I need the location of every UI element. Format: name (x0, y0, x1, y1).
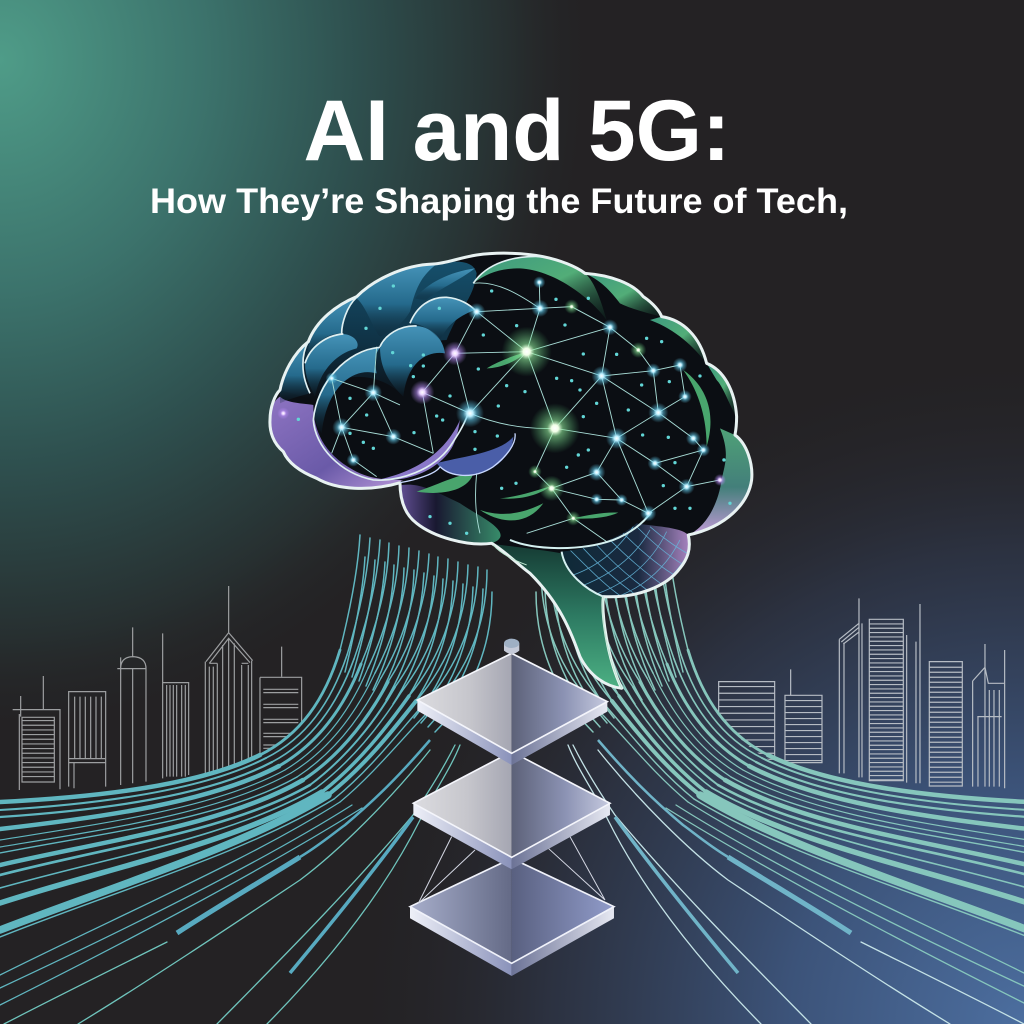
right city skyline (719, 598, 1005, 788)
upper lobe underlay (280, 262, 477, 400)
brain stem (492, 543, 622, 688)
right thin lower strands (568, 745, 1024, 1024)
title: AI and 5G: (304, 83, 730, 179)
right lower lobe (688, 428, 752, 535)
left thick lower strands (177, 740, 430, 973)
left city skyline (13, 586, 302, 790)
middle plate (413, 752, 610, 869)
blue lobes (280, 264, 475, 433)
neuron dots (298, 286, 730, 533)
right thick lower strands (598, 740, 851, 973)
glowing green hubs (502, 299, 646, 526)
right fibre-optic strands (536, 535, 1024, 1005)
green lobes (473, 256, 737, 417)
brain silhouette (270, 253, 752, 688)
subtitle: How They’re Shaping the Future of Tech, (150, 182, 848, 221)
temporal lobe (401, 485, 501, 544)
bottom plate (410, 837, 614, 976)
top connector cylinder (504, 639, 519, 654)
brain outline and fold lines (270, 253, 752, 688)
top plate (417, 653, 607, 765)
cerebellum mesh (562, 523, 693, 600)
brain (270, 253, 752, 688)
accent streaks (377, 352, 710, 520)
network links (332, 282, 720, 542)
glowing purple nodes (277, 341, 726, 486)
glowing blue nodes (326, 276, 710, 521)
purple lobe left (270, 397, 403, 488)
left thin lower strands (4, 745, 460, 1024)
stacked glass plates (410, 639, 614, 976)
left fibre-optic strands (0, 535, 492, 1005)
